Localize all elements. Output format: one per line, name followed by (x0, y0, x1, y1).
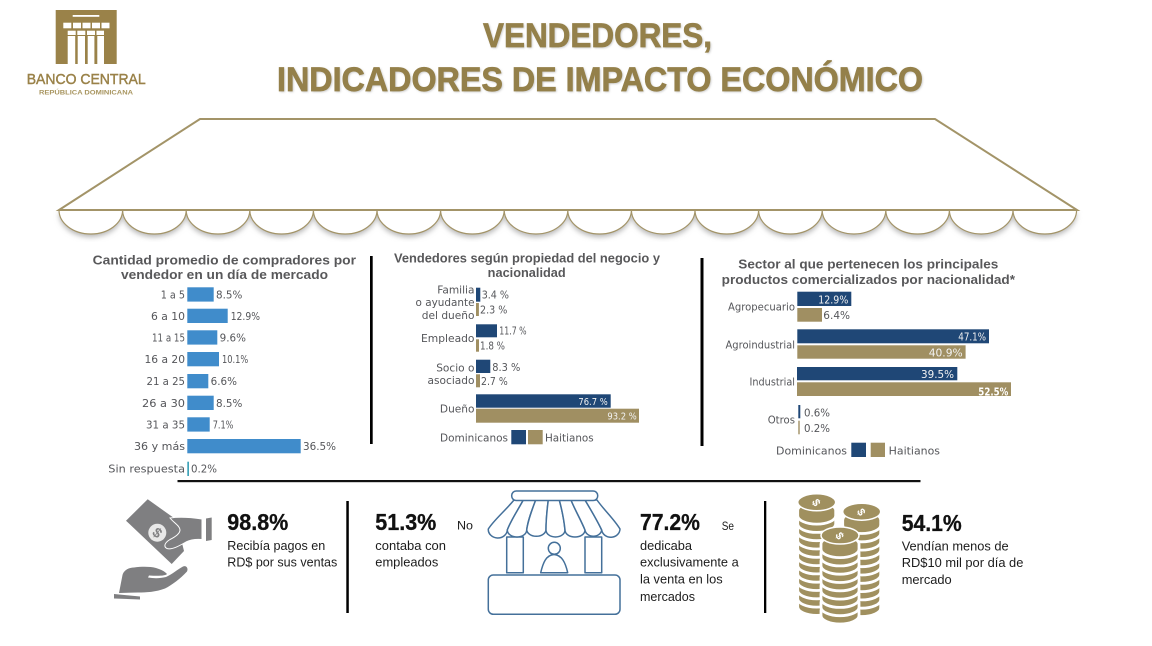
values: 6.6% (211, 377, 237, 388)
values (804, 293, 1008, 435)
awning (59, 119, 1077, 237)
values: 52.5% (978, 385, 1008, 398)
stat: pagos en RD$: Recibía pagos en (227, 538, 325, 553)
values: 10.1% (222, 355, 249, 366)
legend (776, 443, 940, 458)
chart heading: nacionalidad (488, 266, 566, 280)
icon: hands with money: $ (149, 524, 166, 541)
stat: venta en los mercados (640, 509, 739, 604)
icon: coin stacks: $ (854, 507, 867, 518)
category labels: Otros (768, 414, 795, 426)
stat: pagos en RD$ (227, 509, 338, 570)
category labels: Dueño (440, 404, 474, 416)
bars (476, 288, 639, 423)
category labels: 11 a 15 (152, 332, 185, 344)
chart heading: vendedor en un día de mercado (121, 268, 328, 282)
stat: pagos en RD$: 98.8% (227, 509, 288, 535)
logo: Banco Central: REPÚBLICA DOMINICANA (39, 87, 133, 96)
category labels: 26 a 30 (142, 397, 185, 410)
values: 8.5% (216, 399, 243, 410)
values: 0.6% (804, 409, 830, 420)
values: 0.2% (804, 424, 830, 435)
stat: ventas por día: 54.1% (902, 510, 962, 536)
category labels: 36 y más (134, 440, 185, 453)
category labels: asociado (428, 375, 474, 387)
title: VENDEDORES, (483, 17, 712, 55)
legend: Haitianos (545, 434, 594, 444)
stat: empleados: empleados (375, 555, 439, 570)
icon: hands with money (114, 499, 212, 600)
values: 3.4 % (482, 290, 509, 301)
category labels: 1 a 5 (161, 288, 185, 302)
divider right (700, 258, 704, 446)
icon: coin stacks: $ (809, 497, 822, 509)
values: 2.3 % (480, 305, 508, 316)
chart heading: Cantidad promedio de compradores por (93, 253, 356, 267)
stat: empleados: 51.3% (375, 509, 436, 535)
stat: empleados: contaba con (375, 538, 446, 553)
chart heading (93, 253, 356, 282)
divider left (370, 256, 373, 444)
stat: ventas por día (902, 510, 1023, 587)
stat: ventas por día: mercado (902, 572, 952, 587)
chart heading: Sector al que pertenecen los principales (738, 258, 998, 272)
legend: Dominicanos (440, 434, 508, 444)
legend: Haitianos (889, 446, 940, 458)
title: VENDEDORES, (484, 18, 713, 56)
category labels (108, 288, 185, 476)
values (480, 290, 637, 423)
category labels: o ayudante (416, 297, 474, 309)
values: 11.7 % (499, 326, 527, 337)
stat: venta en los mercados: mercados (640, 589, 695, 604)
chart heading (394, 252, 660, 280)
legend (440, 430, 594, 444)
values: 39.5% (921, 368, 954, 381)
stat: pagos en RD$: RD$ por sus ventas (227, 555, 338, 570)
stat: venta en los mercados: dedicaba (640, 538, 693, 553)
values: 1.8 % (480, 342, 505, 353)
values: 2.7 % (481, 377, 508, 388)
stat: ventas por día: RD$10 mil por día de (902, 555, 1023, 570)
values: 9.6% (220, 334, 246, 344)
values: 47.1% (958, 331, 986, 344)
icon: market stall (488, 491, 620, 614)
logo: Banco Central: BANCO CENTRAL (27, 71, 146, 88)
stat: ventas por día: Vendían menos de (902, 539, 1009, 554)
category labels (416, 284, 474, 416)
stat: venta en los mercados: exclusivamente a (640, 555, 739, 570)
chart heading: Vendedores según propiedad del negocio y (394, 252, 660, 266)
category labels: Agroindustrial (726, 339, 795, 351)
stat: empleados: No (457, 518, 473, 532)
title (277, 17, 924, 100)
legend: Dominicanos (776, 446, 847, 458)
category labels: Empleado (421, 333, 474, 345)
bars (797, 292, 1011, 434)
category labels: Agropecuario (728, 301, 795, 313)
logo: Banco Central (27, 10, 146, 96)
values: 12.9% (818, 293, 848, 306)
category labels: 21 a 25 (146, 375, 185, 388)
stat: venta en los mercados: Se (722, 519, 734, 533)
category labels: Socio o (436, 363, 474, 375)
values: 7.1% (213, 420, 234, 432)
divider stat 1 (346, 501, 349, 613)
stat: venta en los mercados: 77.2% (640, 509, 700, 535)
category labels: 31 a 35 (146, 418, 185, 432)
values: 0.2% (191, 464, 217, 476)
category labels: 6 a 10 (151, 310, 185, 323)
chart: sector de productos (722, 258, 1015, 458)
chart heading (722, 258, 1015, 287)
chart: compradores por vendedor (93, 253, 356, 476)
values: 40.9% (929, 347, 963, 360)
title: INDICADORES DE IMPACTO ECONÓMICO (277, 61, 923, 99)
values: 36.5% (303, 442, 336, 453)
category labels: Industrial (750, 376, 795, 388)
values: 8.5% (216, 290, 243, 302)
title: INDICADORES DE IMPACTO ECONÓMICO (278, 62, 924, 100)
values: 76.7 % (578, 397, 608, 408)
horizontal divider (178, 480, 920, 482)
category labels: 16 a 20 (144, 353, 185, 366)
values: 12.9% (231, 312, 260, 323)
bars (187, 287, 301, 476)
category labels: Sin respuesta (108, 462, 185, 476)
values (191, 290, 336, 476)
values: 93.2 % (607, 412, 637, 423)
values: 8.3 % (492, 363, 521, 374)
category labels (726, 301, 795, 426)
values: 6.4% (823, 311, 850, 322)
category labels: del dueño (422, 310, 474, 322)
divider stat 3 (764, 501, 766, 613)
stat: empleados (375, 509, 473, 570)
icon: coin stacks (798, 494, 881, 624)
stat: venta en los mercados: la venta en los (640, 572, 723, 587)
chart heading: productos comercializados por nacionalidad* (722, 273, 1015, 287)
icon: coin stacks: $ (832, 530, 846, 542)
category labels: Familia (437, 284, 474, 296)
chart: propiedad del negocio (394, 252, 660, 444)
